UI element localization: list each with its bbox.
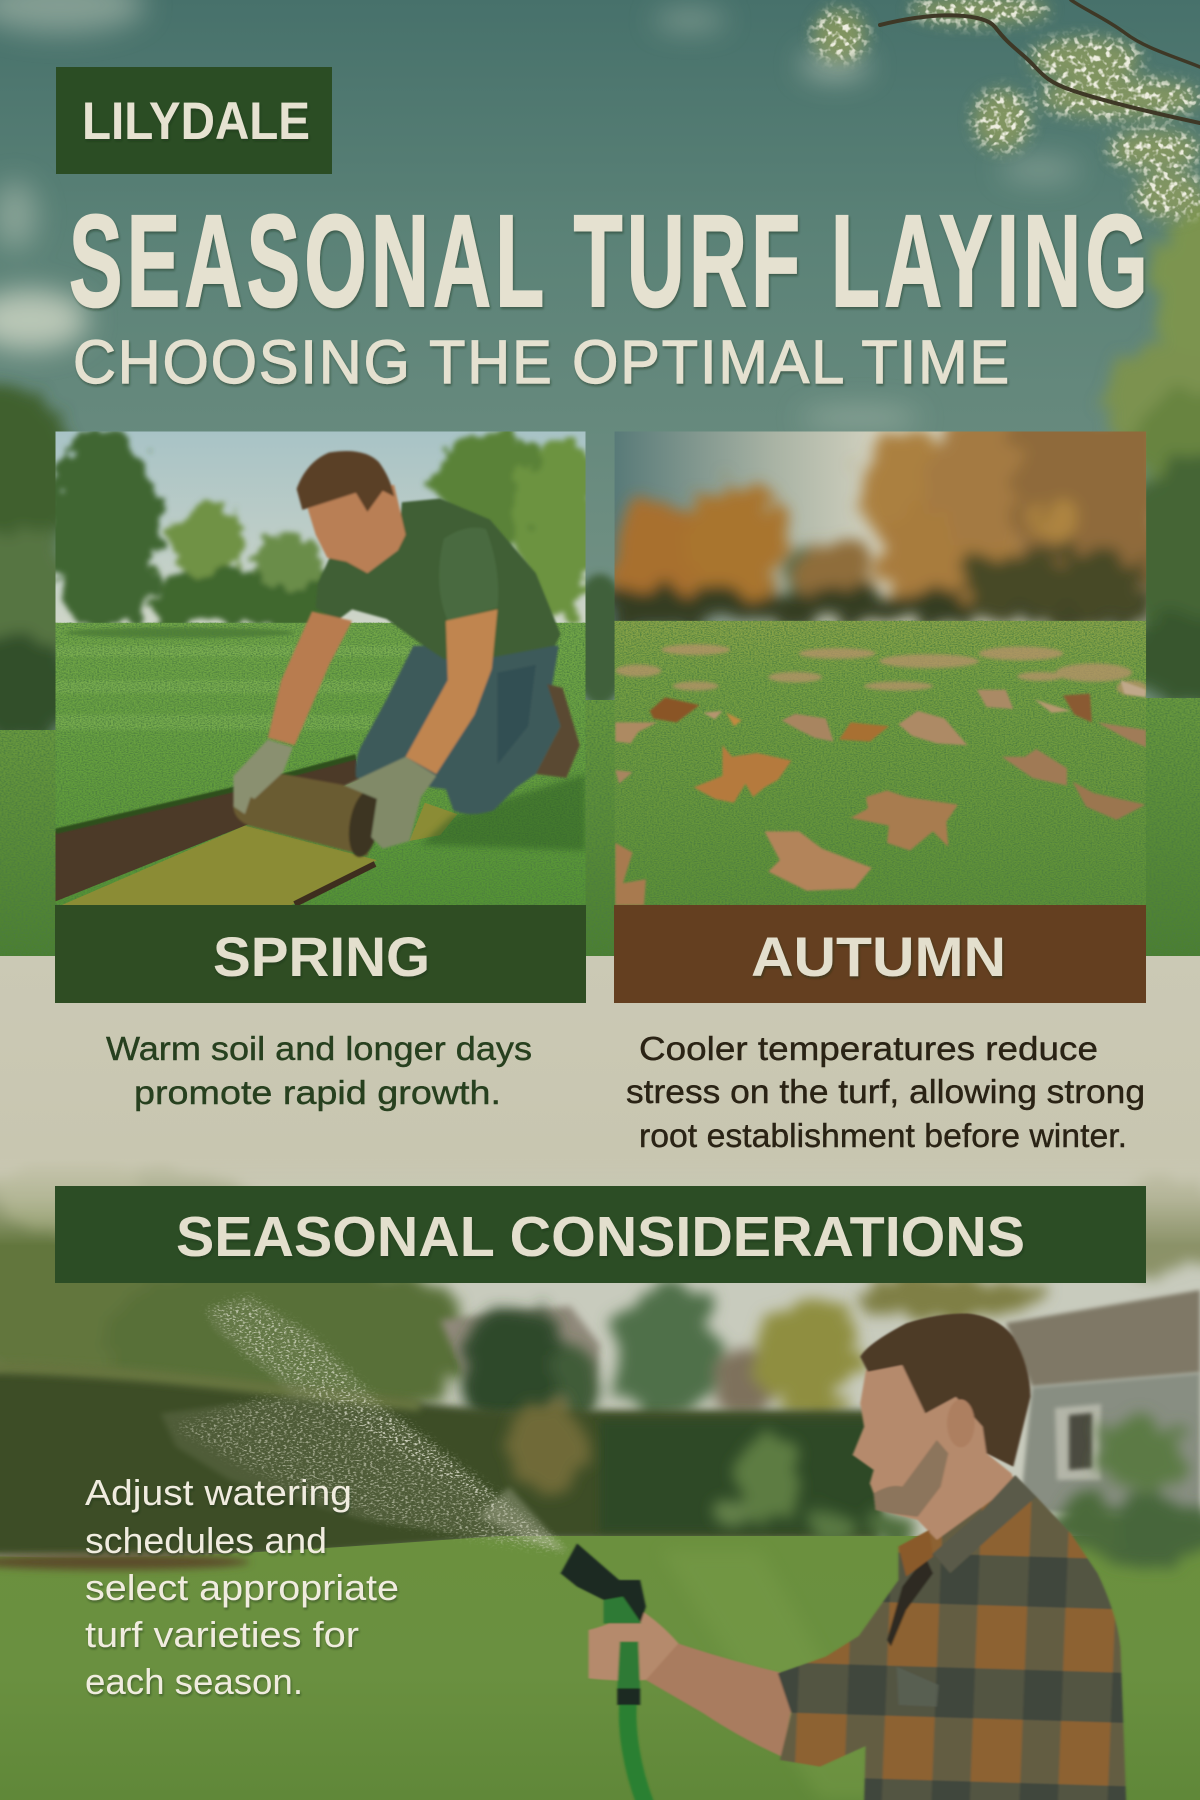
watering description: turf varieties for	[85, 1614, 359, 1655]
man laying turf	[233, 451, 580, 859]
section heading: seasonal considerations: SEASONAL CONSIDERATIONS	[176, 1205, 1025, 1269]
photo: spring turf laying	[46, 428, 601, 906]
autumn trees	[608, 412, 1166, 625]
water spray	[161, 1297, 566, 1552]
autumn description: root establishment before winter.	[639, 1117, 1127, 1154]
fallen leaves	[615, 680, 1146, 905]
turf roll	[233, 774, 379, 856]
autumn description: Cooler temperatures reduce	[639, 1030, 1098, 1067]
house	[1006, 1290, 1200, 1568]
arms	[268, 611, 352, 745]
watering description	[85, 1472, 399, 1702]
autumn description	[626, 1030, 1145, 1154]
label: spring: SPRING	[213, 925, 430, 988]
brand tag: LILYDALE	[82, 92, 310, 151]
paper panel	[0, 956, 1200, 1246]
blossom tree branch	[812, 0, 1200, 219]
boot	[536, 684, 580, 778]
brand tag	[56, 67, 332, 174]
background lawn	[0, 730, 60, 956]
rolled sleeve	[778, 1635, 872, 1767]
neck and face	[853, 1353, 1015, 1540]
jeans	[356, 646, 561, 814]
gloves	[233, 740, 293, 814]
face	[306, 485, 406, 573]
hedge	[0, 1366, 914, 1556]
right background trees	[1100, 200, 1200, 710]
freshly laid turf	[61, 803, 457, 905]
spring description: promote rapid growth.	[134, 1074, 501, 1111]
nozzle and grip	[561, 1543, 646, 1705]
shadow on the lawn	[421, 774, 586, 851]
man with hose	[561, 1313, 1126, 1800]
photo: autumn leaves on lawn	[608, 412, 1166, 906]
hair	[297, 451, 394, 512]
subtitle: CHOOSING THE OPTIMAL TIME	[73, 328, 1011, 396]
beard	[874, 1440, 948, 1517]
label: autumn	[614, 905, 1146, 1003]
top background: sky and lawn	[0, 0, 1200, 956]
distant leaves	[615, 644, 1147, 696]
lawn	[0, 1536, 1200, 1800]
left background trees	[0, 390, 85, 740]
clouds	[0, 0, 1080, 428]
ear	[947, 1399, 975, 1447]
forearm	[646, 1642, 791, 1757]
shirt	[316, 498, 561, 659]
watering description: Adjust watering	[85, 1472, 352, 1513]
hair	[860, 1313, 1031, 1467]
lower scene	[0, 1130, 1200, 1800]
plaid shirt	[858, 1480, 1126, 1800]
watering description: each season.	[85, 1661, 303, 1702]
spring description: Warm soil and longer days	[106, 1030, 532, 1067]
label: autumn: AUTUMN	[751, 925, 1006, 988]
bare soil strip	[55, 759, 360, 901]
collar	[899, 1530, 933, 1577]
shirt pocket	[897, 1667, 939, 1707]
hose	[628, 1697, 645, 1800]
autumn description: stress on the turf, allowing strong	[626, 1073, 1145, 1110]
blurred background trees	[0, 1166, 1200, 1416]
hand	[589, 1608, 678, 1681]
spring description	[106, 1030, 532, 1111]
mowing stripes	[55, 646, 419, 730]
watering description: schedules and	[85, 1520, 327, 1561]
label: spring	[55, 905, 586, 1003]
spring background trees	[56, 432, 586, 623]
section heading: seasonal considerations	[55, 1186, 1146, 1283]
watering description: select appropriate	[85, 1567, 399, 1608]
